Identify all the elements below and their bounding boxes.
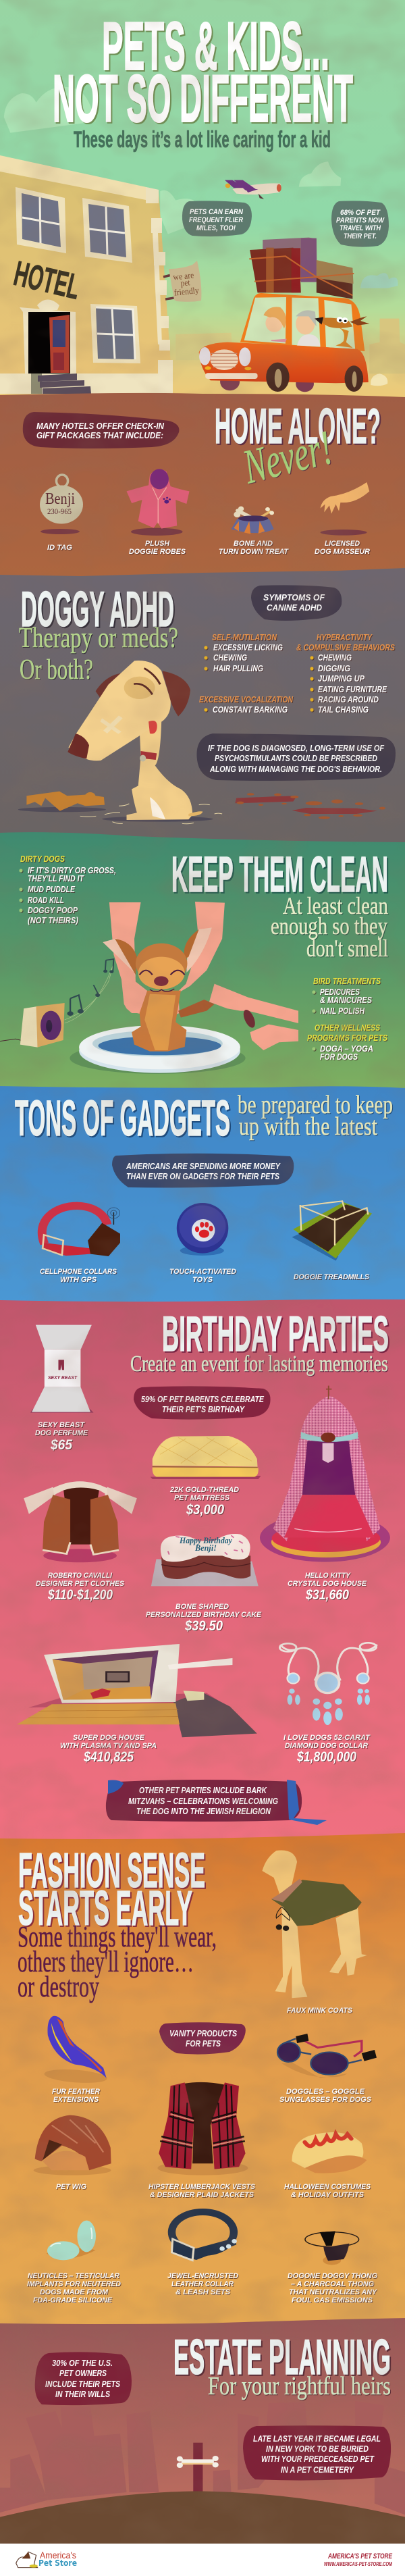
callout: wills: PET OWNERS [59,2369,107,2378]
icon: thong [305,2231,359,2265]
window [90,304,140,363]
store name and url [324,2552,392,2567]
icon: bone-shaped cake [151,1534,259,1586]
label with price: BONE SHAPED [176,1603,229,1611]
symptom list: self-mutilation [204,633,283,673]
callout: burial law [243,2425,391,2480]
icon: id tag: 230-965 [47,507,72,516]
icon: id tag [40,475,83,534]
illustration: spa dog in tub [0,902,298,1074]
icon: bone-shaped cake: Happy Birthday [179,1535,232,1545]
callout: diagnosis [196,733,396,781]
callout: bark mitzvahs: OTHER PET PARTIES INCLUDE BARK [139,1786,267,1795]
icon: touch toy [177,1203,228,1256]
label: JEWEL-ENCRUSTED [167,2272,238,2280]
callout: burial law: LATE LAST YEAR IT BECAME LEGAL [253,2434,381,2444]
label: DOGS MADE FROM [40,2288,109,2296]
illustration: dog [68,661,222,824]
callout: gift packages: GIFT PACKAGES THAT INCLUDE: [36,431,163,440]
callout: celebrate: 59% OF PET PARENTS CELEBRATE [141,1395,265,1404]
label [52,2088,100,2104]
label: TOUCH-ACTIVATED [169,1268,236,1276]
panel: estate planning [0,2318,405,2546]
list: bird treatments [312,977,381,1016]
skyline [0,2401,405,2515]
label [169,1268,236,1284]
logo: Pet Store [38,2558,77,2568]
panel: fashion sense: FASHION SENSE [18,1844,205,1898]
label: & DESIGNER PLAID JACKETS [150,2191,254,2199]
callout: vanity products: VANITY PRODUCTS [169,2029,238,2038]
driver [271,339,287,342]
subheading: Never! [238,420,338,494]
callout: bark mitzvahs: MITZVAHS – CELEBRATIONS WELCOMING [128,1797,278,1806]
icon: mattress [151,1436,261,1479]
wheels [266,363,290,392]
label with price [288,1572,367,1603]
label with price: SUPER DOG HOUSE [73,1734,145,1742]
symptom list: self-mutilation: CHEWING [213,653,247,663]
speaker with notes [0,959,113,1048]
dog [315,318,352,328]
cabin [240,293,364,351]
window [82,198,132,263]
main title [53,9,353,136]
label: DOGGIE ROBES [129,548,186,556]
icon: pet wig [34,2115,111,2175]
speech bubble: 68 percent [331,201,389,247]
callout: spending: AMERICANS ARE SPENDING MORE MONEY [126,1162,281,1171]
label [40,1268,117,1284]
list: bird treatments: BIRD TREATMENTS [313,977,381,986]
luggage [249,238,354,299]
label with price: CRYSTAL DOG HOUSE [288,1580,367,1588]
clouds [4,87,398,288]
head [136,944,187,991]
callout: bark mitzvahs: THE DOG INTO THE JEWISH RELIGION [136,1807,271,1816]
speech bubble: 68 percent: 68% OF PET [340,209,381,217]
pavement and steps [0,373,159,394]
label: FDA-GRADE SILICONE [33,2296,113,2304]
icon: plaid vest [157,2082,248,2175]
window [16,187,66,253]
callout: diagnosis: ALONG WITH MANAGING THE DOG'S BEHAVIOR. [209,765,382,774]
speech bubble: frequent flier [182,201,252,236]
subheading: Therapy or meds? [19,623,178,654]
subheading [19,623,178,686]
label: FUR FEATHER [52,2088,100,2096]
panel: keep them clean [0,832,405,1094]
label with price: $110-$1,200 [47,1587,113,1603]
label: IMPLANTS FOR NEUTERED [27,2280,121,2288]
subheading: or destroy [18,1970,99,2003]
label: DOGGLES – GOGGLE [286,2088,365,2096]
label [167,2272,238,2296]
icon: gps collar [42,1206,120,1256]
callout: vanity products: FOR PETS [186,2039,221,2049]
symptom list: hyperactivity: RACING AROUND [318,695,379,704]
subheading: others they'll ignore… [18,1945,194,1978]
label with price [60,1734,157,1765]
symptom list: hyperactivity: DIGGING [318,664,350,673]
illustration: chewed bone [18,792,106,812]
label [315,540,370,556]
hotel building [0,155,201,394]
label: HIPSTER LUMBERJACK VESTS [148,2183,256,2191]
panel: doggy adhd [0,568,405,851]
list: dirty dogs: ROAD KILL [28,896,64,905]
label with price: DOG PERFUME [35,1429,88,1437]
list: other wellness: FOR DOGS [320,1052,358,1062]
pet friendly sign: friendly [173,285,200,298]
callout: bark mitzvahs [106,1780,327,1825]
dog body [132,991,215,1052]
arms [109,902,225,1015]
label: PLUSH [145,540,170,548]
icon: masseur hand [321,482,369,536]
panel: doggy adhd: DOGGY ADHD [21,582,174,637]
callout: spending [112,1154,294,1187]
passenger [297,334,321,346]
label: EXTENSIONS [53,2096,99,2104]
speech bubble: frequent flier: MILES, TOO! [196,224,236,232]
list: bird treatments: NAIL POLISH [320,1006,365,1016]
front details [199,347,211,365]
heading [18,1844,205,1936]
label [279,2088,372,2104]
label with price: $65 [50,1437,72,1453]
icon: neuticles [47,2221,96,2260]
panel: fashion sense [0,1833,405,2330]
symptom list: hyperactivity: EATING FURNITURE [318,685,387,694]
label with price [146,1603,262,1634]
subheading [238,1091,393,1141]
door [20,300,76,373]
label with price: $1,800,000 [296,1749,356,1765]
icon: perfume: SEXY BEAST [48,1376,78,1381]
callout: wills: IN THEIR WILLS [55,2390,111,2399]
label [27,2272,121,2304]
illustration: greyhound in coat [262,1851,367,1998]
callout: celebrate: THEIR PET'S BIRTHDAY [162,1405,245,1414]
tub [70,1025,246,1074]
icon: bone and bowl [232,507,274,534]
icon: id tag: Benji [45,490,75,508]
speech bubble: 68 percent: PARENTS NOW [336,216,385,224]
symptom list: hyperactivity: CHEWING [318,653,352,663]
list: bird treatments: & MANICURES [320,996,373,1005]
callout: symptoms: CANINE ADHD [267,603,322,613]
label with price: DESIGNER PET CLOTHES [36,1580,125,1588]
label with price [169,1486,239,1518]
callout: diagnosis: IF THE DOG IS DIAGNOSED, LONG-TERM USE OF [208,744,384,753]
symptom list: vocalization: EXCESSIVE VOCALIZATION [199,695,294,704]
label with price: 22K GOLD-THREAD [169,1486,239,1494]
list: other wellness: DOGA – YOGA [320,1044,373,1054]
label: – A CHARCOAL THONG [291,2280,374,2288]
icon: treadmill [292,1201,372,1261]
panel: home alone [0,393,405,581]
car with family, dog and luggage [199,238,387,392]
pedicure hands [209,984,298,1050]
callout: spending: THAN EVER ON GADGETS FOR THEIR PETS [126,1172,280,1181]
label: LEATHER COLLAR [171,2280,234,2288]
label: NEUTICLES – TESTICULAR [28,2272,119,2280]
label: SUNGLASSES FOR DOGS [279,2096,372,2104]
callout: celebrate [134,1386,271,1420]
list: dirty dogs: IF IT'S DIRTY OR GROSS, [28,866,116,875]
label with price: ROBERTO CAVALLI [48,1572,113,1580]
callout: burial law: IN NEW YORK TO BE BURIED [266,2444,369,2454]
symptom list: hyperactivity [296,633,396,715]
label: FAUX MINK COATS [287,2007,353,2015]
icon: airplane [225,180,281,199]
panel: gadgets [0,1086,405,1307]
wheels far side [220,373,240,390]
callout: gift packages: MANY HOTELS OFFER CHECK-IN [36,421,165,431]
symptom list: vocalization [199,695,294,715]
logo [16,2550,77,2568]
label: LICENSED [325,540,360,548]
label with price: SEXY BEAST [38,1421,85,1429]
speech bubble: 68 percent: THEIR PET. [344,232,377,240]
label with price [284,1734,371,1765]
list: dirty dogs [19,854,116,925]
label: BONE AND [234,540,273,548]
callout: burial law: IN A PET CEMETERY [281,2465,354,2475]
subheading [18,1920,217,2003]
label [129,540,186,556]
label [219,540,289,556]
symptom list: vocalization: CONSTANT BARKING [213,705,288,715]
symptom list: hyperactivity: HYPERACTIVITY [317,633,373,642]
logo: America's [40,2550,76,2560]
label: DOGONE DOGGY THONG [288,2272,377,2280]
speech bubble: frequent flier: FREQUENT FLIER [189,216,243,224]
speech bubble: 68 percent: TRAVEL WITH [340,224,381,232]
label: HALLOWEEN COSTUMES [284,2183,371,2191]
label: FOUL GAS EMISSIONS [292,2296,373,2304]
icon: jeweled collar [171,2212,237,2261]
body [199,342,369,383]
illustration: grave hill with bone marker [0,2443,405,2544]
footer [0,2544,405,2576]
callout: wills: 30% OF THE U.S. [52,2359,113,2368]
callout: burial law: WITH YOUR PREDECEASED PET [261,2454,375,2464]
illustration: chewed debris [235,793,385,819]
callout: symptoms [251,585,342,621]
label [288,2272,378,2304]
label: TOYS [192,1276,213,1284]
list: dirty dogs: DIRTY DOGS [20,854,65,864]
icon: bone-shaped cake: Benji! [194,1543,217,1553]
label: & HOLIDAY OUTFITS [291,2191,364,2199]
panel: birthday parties [0,1299,405,1847]
pet friendly sign [163,261,201,302]
label: DOG MASSEUR [315,548,370,556]
subheading: Some things they'll wear, [18,1920,217,1953]
hotel sign: HOTEL [10,254,84,307]
subheading: Or both? [20,654,93,686]
symptom list: self-mutilation: EXCESSIVE LICKING [213,643,283,652]
ears [103,927,212,977]
label: CELLPHONE COLLARS [40,1268,117,1276]
label with price: $39.50 [184,1618,223,1634]
callout: symptoms: SYMPTOMS OF [263,593,325,602]
label with price: PET MATTRESS [174,1494,230,1502]
label: TURN DOWN TREAT [219,548,289,556]
list: bird treatments: PEDICURES [320,987,360,997]
symptom list: hyperactivity: TAIL CHASING [318,705,369,715]
list: dirty dogs: (NOT THEIRS) [28,916,78,925]
label with price: PERSONALIZED BIRTHDAY CAKE [146,1611,262,1619]
callout: wills [35,2352,132,2405]
label with price: $31,660 [305,1587,349,1603]
label: ID TAG [47,544,72,552]
heading: STARTS EARLY [18,1882,192,1936]
pet friendly sign: we are [173,269,194,282]
label with price [35,1421,88,1453]
label: THAT NEUTRALIZES ANY [289,2288,378,2296]
distant skyline [176,319,405,373]
label [284,2183,371,2199]
label with price: DIAMOND DOG COLLAR [285,1742,368,1750]
label with price: HELLO KITTY [305,1572,352,1580]
list: other wellness [307,1023,388,1062]
icon: doggles [277,2034,377,2078]
label with price: WITH PLASMA TV AND SPA [60,1742,157,1750]
label: PET WIG [56,2183,86,2191]
icon: hot dog costume [292,2132,367,2173]
list: dirty dogs: MUD PUDDLE [28,885,76,894]
label with price: $3,000 [186,1502,224,1518]
icon: perfume [30,1325,94,1413]
callout: wills: INCLUDE THEIR PETS [45,2379,121,2389]
list: other wellness: PROGRAMS FOR PETS [307,1033,388,1043]
icon: diamond collar [279,1643,377,1725]
list: dirty dogs: THEY'LL FIND IT [28,874,84,883]
label with price: I LOVE DOGS 52-CARAT [284,1734,371,1742]
speech bubble: frequent flier: PETS CAN EARN [190,208,244,216]
list: other wellness: OTHER WELLNESS [315,1023,381,1033]
callout: vanity products [159,2022,246,2055]
icon: robe [127,469,190,536]
icon: designer vest [24,1481,137,1562]
pet friendly sign: pet [180,277,190,288]
label: & LEASH SETS [176,2288,231,2296]
list: dirty dogs: DOGGY POOP [28,906,78,915]
label [148,2183,256,2199]
symptom list: self-mutilation: SELF-MUTILATION [212,633,277,642]
subheading [271,892,388,962]
callout: diagnosis: PSYCHOSTIMULANTS COULD BE PRESCRIBED [215,754,377,763]
label with price: $410,825 [83,1749,134,1765]
callout: gift packages [23,412,179,448]
icon: feather extension [44,2016,108,2085]
label with price [36,1572,125,1603]
symptom list: self-mutilation: HAIR PULLING [213,664,263,673]
label: DOGGIE TREADMILLS [294,1273,370,1281]
icon: hello kitty crystal dog house [260,1386,390,1562]
label: WITH GPS [60,1276,97,1284]
symptom list: hyperactivity: JUMPING UP [318,674,365,684]
icon: super dog house [17,1644,257,1737]
